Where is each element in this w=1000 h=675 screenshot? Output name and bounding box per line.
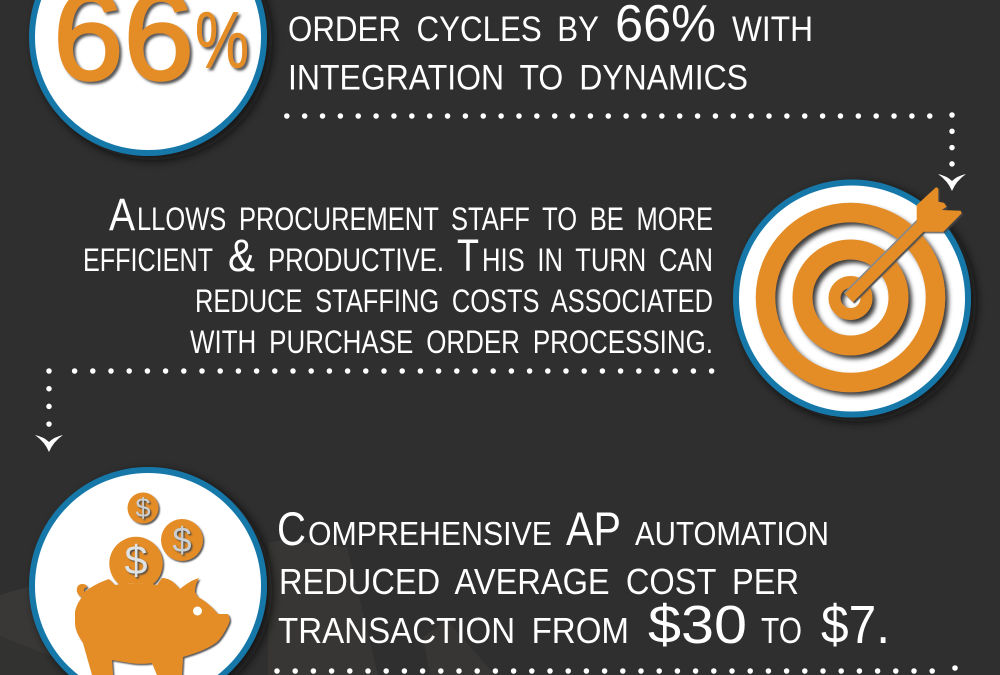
text block: cost per transaction: [277, 502, 890, 655]
text block: procurement staff: HIS IN TURN CAN: [482, 242, 713, 278]
dollar signs: $: [124, 537, 148, 583]
text block: cost per transaction: C: [277, 502, 306, 555]
slot gap: [106, 577, 172, 600]
text block: order cycles: WITH: [732, 9, 813, 49]
dollar signs: $: [136, 493, 150, 523]
text block: order cycles: ORDER CYCLES BY: [288, 9, 599, 49]
text block: cost per transaction: $30: [648, 595, 747, 655]
pig eye: [193, 606, 202, 616]
text block: procurement staff: REDUCE STAFFING COSTS ASSOCIATED: [195, 283, 713, 319]
text block: cost per transaction: REDUCED AVERAGE COST PER: [279, 561, 799, 602]
text block: procurement staff: WITH PURCHASE ORDER PROCESSING.: [190, 324, 713, 360]
text block: procurement staff: &: [228, 230, 255, 281]
text block: procurement staff: A: [109, 189, 135, 240]
text block: cost per transaction: AUTOMATION: [635, 515, 829, 552]
text block: cost per transaction: OMPREHENSIVE: [308, 515, 552, 552]
panel: 66% badge: [32, 0, 264, 153]
target rings: [766, 212, 936, 382]
text block: cost per transaction: TO: [761, 610, 802, 651]
text block: cost per transaction: $7.: [821, 595, 890, 655]
panel: piggy bank badge: [32, 470, 264, 675]
badge circle: [32, 0, 264, 153]
text block: order cycles: [288, 0, 813, 98]
text block: procurement staff: T: [457, 230, 479, 281]
text block: order cycles: INTEGRATION TO DYNAMICS: [288, 58, 748, 98]
icon: arrow: [849, 187, 962, 298]
text block: procurement staff: [83, 189, 713, 360]
arrow: dotted connector to piggy bank: [35, 371, 714, 452]
text block: cost per transaction: AP: [566, 502, 621, 555]
dollar signs: [124, 493, 192, 583]
piggy circle: [32, 470, 264, 675]
text block: procurement staff: LLOWS PROCUREMENT STAFF TO BE MORE: [137, 201, 713, 237]
icon: coins: [109, 492, 203, 590]
dollar signs: $: [172, 521, 192, 560]
arrow: dotted connector bottom: [277, 665, 958, 671]
text block: procurement staff: PRODUCTIVE.: [268, 242, 444, 278]
background shapes: [0, 540, 495, 675]
text block: cost per transaction: TRANSACTION FROM: [278, 610, 629, 651]
panel: target badge: [736, 182, 968, 414]
text block: procurement staff: EFFICIENT: [83, 242, 213, 278]
arrow: dotted connector to target: [287, 115, 966, 191]
icon: piggy bank: [75, 578, 230, 675]
target circle: [736, 182, 968, 414]
